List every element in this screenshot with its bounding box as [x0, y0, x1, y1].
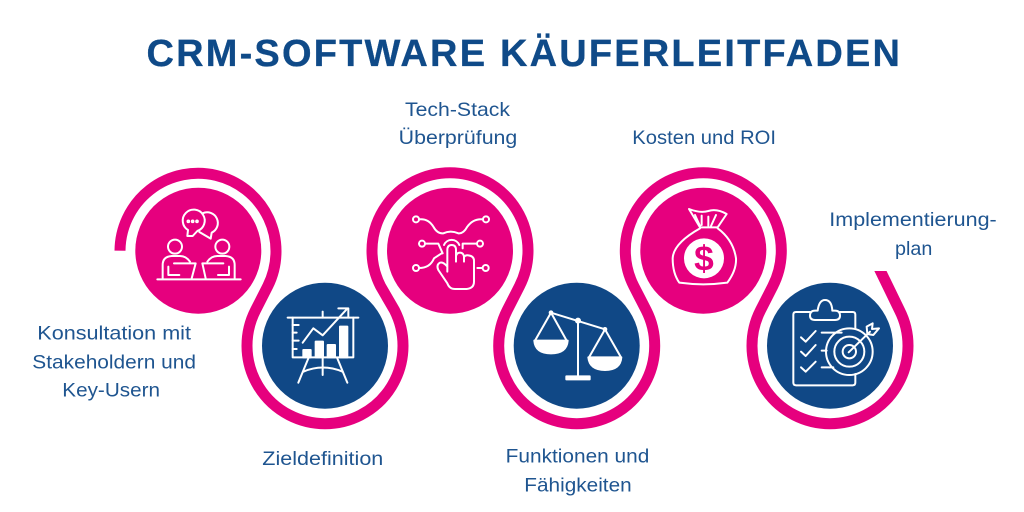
step 6: implementation circle — [767, 283, 893, 409]
step 3: tech stack circle — [387, 188, 513, 314]
label: goal definition: Zieldefinition — [262, 448, 383, 470]
label: features and capabilities — [506, 445, 649, 497]
label: consultation: Stakeholdern und — [32, 352, 196, 374]
step 4: features circle — [514, 283, 640, 409]
label: tech stack review — [399, 99, 517, 149]
icon: hand touching circuit — [413, 216, 489, 289]
label: tech stack review: Überprüfung — [399, 127, 517, 149]
winding ribbon — [120, 173, 908, 424]
label: tech stack review: Tech-Stack — [405, 99, 510, 121]
label: consultation: Key-Usern — [62, 380, 160, 402]
label: consultation: Konsultation mit — [37, 322, 192, 344]
label: cost and ROI: Kosten und ROI — [632, 127, 776, 149]
icon: presentation board with rising chart — [288, 308, 358, 383]
step 5: cost circle — [640, 188, 766, 314]
label: consultation — [32, 322, 196, 402]
title: CRM-SOFTWARE KÄUFERLEITFADEN — [146, 32, 900, 75]
label: implementation plan: plan — [895, 238, 932, 260]
label: features and capabilities: Fähigkeiten — [524, 475, 632, 497]
icon: people talking at laptops — [157, 210, 241, 279]
label: features and capabilities: Funktionen und — [506, 445, 649, 467]
step 1: consultation circle — [135, 188, 261, 314]
label: implementation plan: Implementierung- — [829, 209, 997, 231]
label: implementation plan — [829, 209, 997, 260]
icon: money bag: $ — [694, 239, 714, 278]
icon: balance scale — [534, 311, 621, 379]
icon: clipboard with target — [793, 300, 879, 385]
step 2: goals circle — [262, 283, 388, 409]
